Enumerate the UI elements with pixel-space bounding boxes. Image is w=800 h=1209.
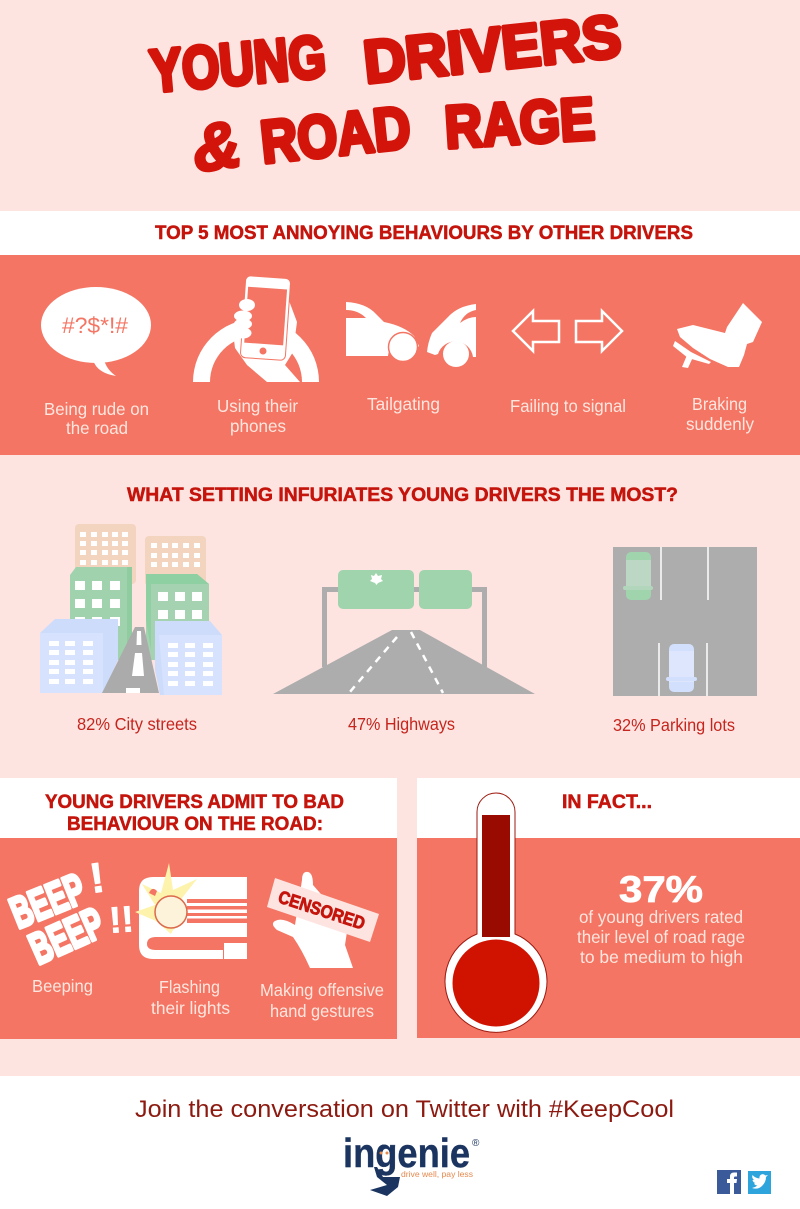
label: braking suddenly: Braking (692, 394, 747, 414)
logo: ingenie (343, 1130, 480, 1196)
label: being rude (44, 399, 149, 438)
icon: censored hand: CENSORED (276, 887, 368, 934)
title: DRIVERS (360, 2, 624, 96)
panel: top 5 annoying behaviours (0, 211, 800, 455)
icon: beep beep: ! (87, 853, 107, 902)
heading: in fact: IN FACT... (562, 792, 652, 813)
panel: bad behaviour (0, 778, 397, 1039)
label: braking suddenly (686, 394, 754, 434)
heading: settings: WHAT SETTING INFURIATES YOUNG DRIVERS THE MOST? (127, 485, 678, 506)
text: stat description: their level of road rage (577, 927, 745, 947)
heading: top 5: TOP 5 MOST ANNOYING BEHAVIOURS BY OTHER DRIVERS (155, 222, 693, 244)
logo: ingenie: ® (472, 1138, 480, 1149)
logo: ingenie: ingenie (343, 1130, 470, 1176)
heading: bad behaviour (45, 792, 344, 835)
icon: hand holding phone on steering wheel (193, 276, 319, 382)
icon: city buildings (40, 524, 222, 695)
text: stat description: of young drivers rated (579, 907, 743, 927)
title: & (188, 106, 245, 186)
label: tailgating: Tailgating (367, 394, 440, 414)
icon: twitter (748, 1171, 771, 1194)
heading: bad behaviour: BEHAVIOUR ON THE ROAD: (67, 814, 323, 835)
icon: highway with overhead signs (273, 570, 535, 694)
icon: foot on brake pedal (673, 303, 762, 368)
label: flashing lights: Flashing (159, 977, 220, 997)
text: stat description: to be medium to high (580, 947, 743, 967)
icon: speech bubble (41, 287, 151, 376)
label: being rude: the road (66, 418, 128, 438)
label: failing to signal: Failing to signal (510, 396, 626, 416)
icon: tailgating cars (346, 302, 476, 367)
label: using phones: Using their (217, 396, 298, 416)
label: flashing lights (151, 977, 230, 1018)
text: call to action: Join the conversation on Twitter with #KeepCool (135, 1096, 674, 1123)
stat: 37 percent: 37% (619, 869, 703, 910)
icon: blue car (666, 644, 697, 692)
label: beeping: Beeping (32, 976, 93, 996)
label: using phones (217, 396, 298, 436)
label: braking suddenly: suddenly (686, 414, 754, 434)
heading: bad behaviour: YOUNG DRIVERS ADMIT TO BAD (45, 792, 344, 813)
label: using phones: phones (230, 416, 286, 436)
panel: footer (0, 1076, 800, 1209)
label: city streets: 82% City streets (77, 714, 197, 734)
title: YOUNG (147, 23, 328, 105)
icon: beep beep: BEEP (22, 898, 111, 974)
title: RAGE (443, 85, 597, 161)
icon: thermometer (445, 793, 547, 1032)
title: ROAD (257, 94, 414, 176)
label: flashing lights: their lights (151, 998, 230, 1018)
label: parking lots: 32% Parking lots (613, 715, 735, 735)
icon: facebook (717, 1170, 741, 1194)
logo: ingenie: drive well, pay less (401, 1170, 473, 1179)
icon: parking lot (613, 547, 757, 696)
label: offensive gestures: Making offensive (260, 980, 384, 1000)
label: offensive gestures (260, 980, 384, 1021)
icon: green car (623, 552, 653, 600)
icon: flashing headlight (135, 863, 247, 959)
text: stat description (577, 907, 745, 967)
label: being rude: Being rude on (44, 399, 149, 419)
icon: speech bubble: #?$*!# (62, 313, 129, 338)
icon: beep beep: !! (108, 898, 135, 941)
title (147, 2, 624, 186)
label: offensive gestures: hand gestures (270, 1001, 374, 1021)
icon: beep beep (3, 853, 135, 974)
icon: beep beep: BEEP (3, 864, 92, 938)
label: highways: 47% Highways (348, 714, 455, 734)
panel: in fact (417, 778, 800, 1038)
icon: censored hand (267, 872, 379, 968)
icon: indicator arrows (513, 311, 622, 351)
